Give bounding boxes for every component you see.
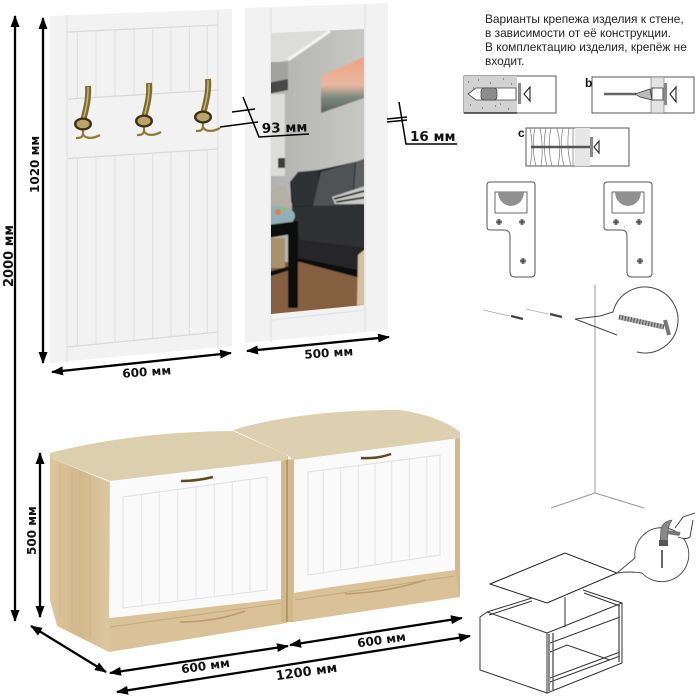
icon: screw detail — [619, 317, 669, 335]
panel: coat rack — [50, 9, 232, 363]
dimension labels: 600 мм — [356, 630, 407, 650]
bench right strip — [455, 436, 460, 597]
dimension labels: 2000 мм — [2, 225, 17, 287]
text block: mounting note: В комплектацию изделия, крепёж не — [485, 40, 687, 54]
diagram c: wood wall screw — [518, 126, 629, 166]
label c: c — [518, 126, 525, 140]
cabinet body — [480, 590, 622, 693]
icon: handle left — [181, 477, 213, 481]
door right — [294, 439, 455, 592]
diagram: wall corner with screws — [483, 285, 678, 508]
dimension labels: 600 мм — [122, 363, 172, 381]
bench centre strip — [281, 459, 294, 622]
panel: wall mirror — [245, 3, 388, 343]
icon: mounting bracket right — [604, 182, 652, 277]
bench base left — [109, 597, 287, 652]
dimension labels: 1200 мм — [275, 661, 338, 684]
dimension labels: 500 мм — [25, 506, 39, 555]
bench side — [50, 458, 110, 652]
label b: b — [585, 76, 592, 90]
diagram: cabinet assembly — [480, 513, 695, 693]
seat cushion left — [50, 431, 287, 481]
icon: mounting bracket left — [487, 182, 535, 277]
mirror reflection photo — [271, 29, 364, 314]
text block: mounting note: Варианты крепежа изделия к стене, — [485, 12, 684, 26]
dimension labels — [2, 119, 456, 684]
icon: coat hook 3 — [194, 79, 220, 131]
bench base right — [293, 566, 460, 622]
icon: hammer and hand — [659, 513, 695, 568]
back panel sheet — [490, 553, 617, 603]
panel: shoe bench — [50, 410, 460, 652]
hammer callout — [617, 528, 689, 582]
diagram a: concrete wall anchor — [464, 76, 556, 113]
seat cushion right — [233, 410, 460, 460]
dimension labels: 1020 мм — [28, 136, 42, 193]
text block: mounting note: входит. — [485, 54, 524, 68]
dimension arrows — [15, 16, 470, 692]
icon: handle right — [361, 454, 391, 458]
dimension labels: 93 мм — [262, 119, 308, 137]
diagram b: drywall anchor — [585, 76, 694, 113]
dimension labels: 500 мм — [304, 344, 354, 362]
thickness marker 16 mm — [387, 102, 457, 144]
icon: coat hook 1 — [74, 86, 100, 138]
door left — [110, 460, 281, 618]
thickness marker 93 mm — [220, 97, 309, 137]
text block: mounting note: в зависимости от её конструкции. — [485, 26, 671, 40]
icon: coat hook 2 — [135, 83, 161, 135]
dimension labels: 600 мм — [180, 656, 231, 676]
dimension labels: 16 мм — [410, 129, 456, 145]
